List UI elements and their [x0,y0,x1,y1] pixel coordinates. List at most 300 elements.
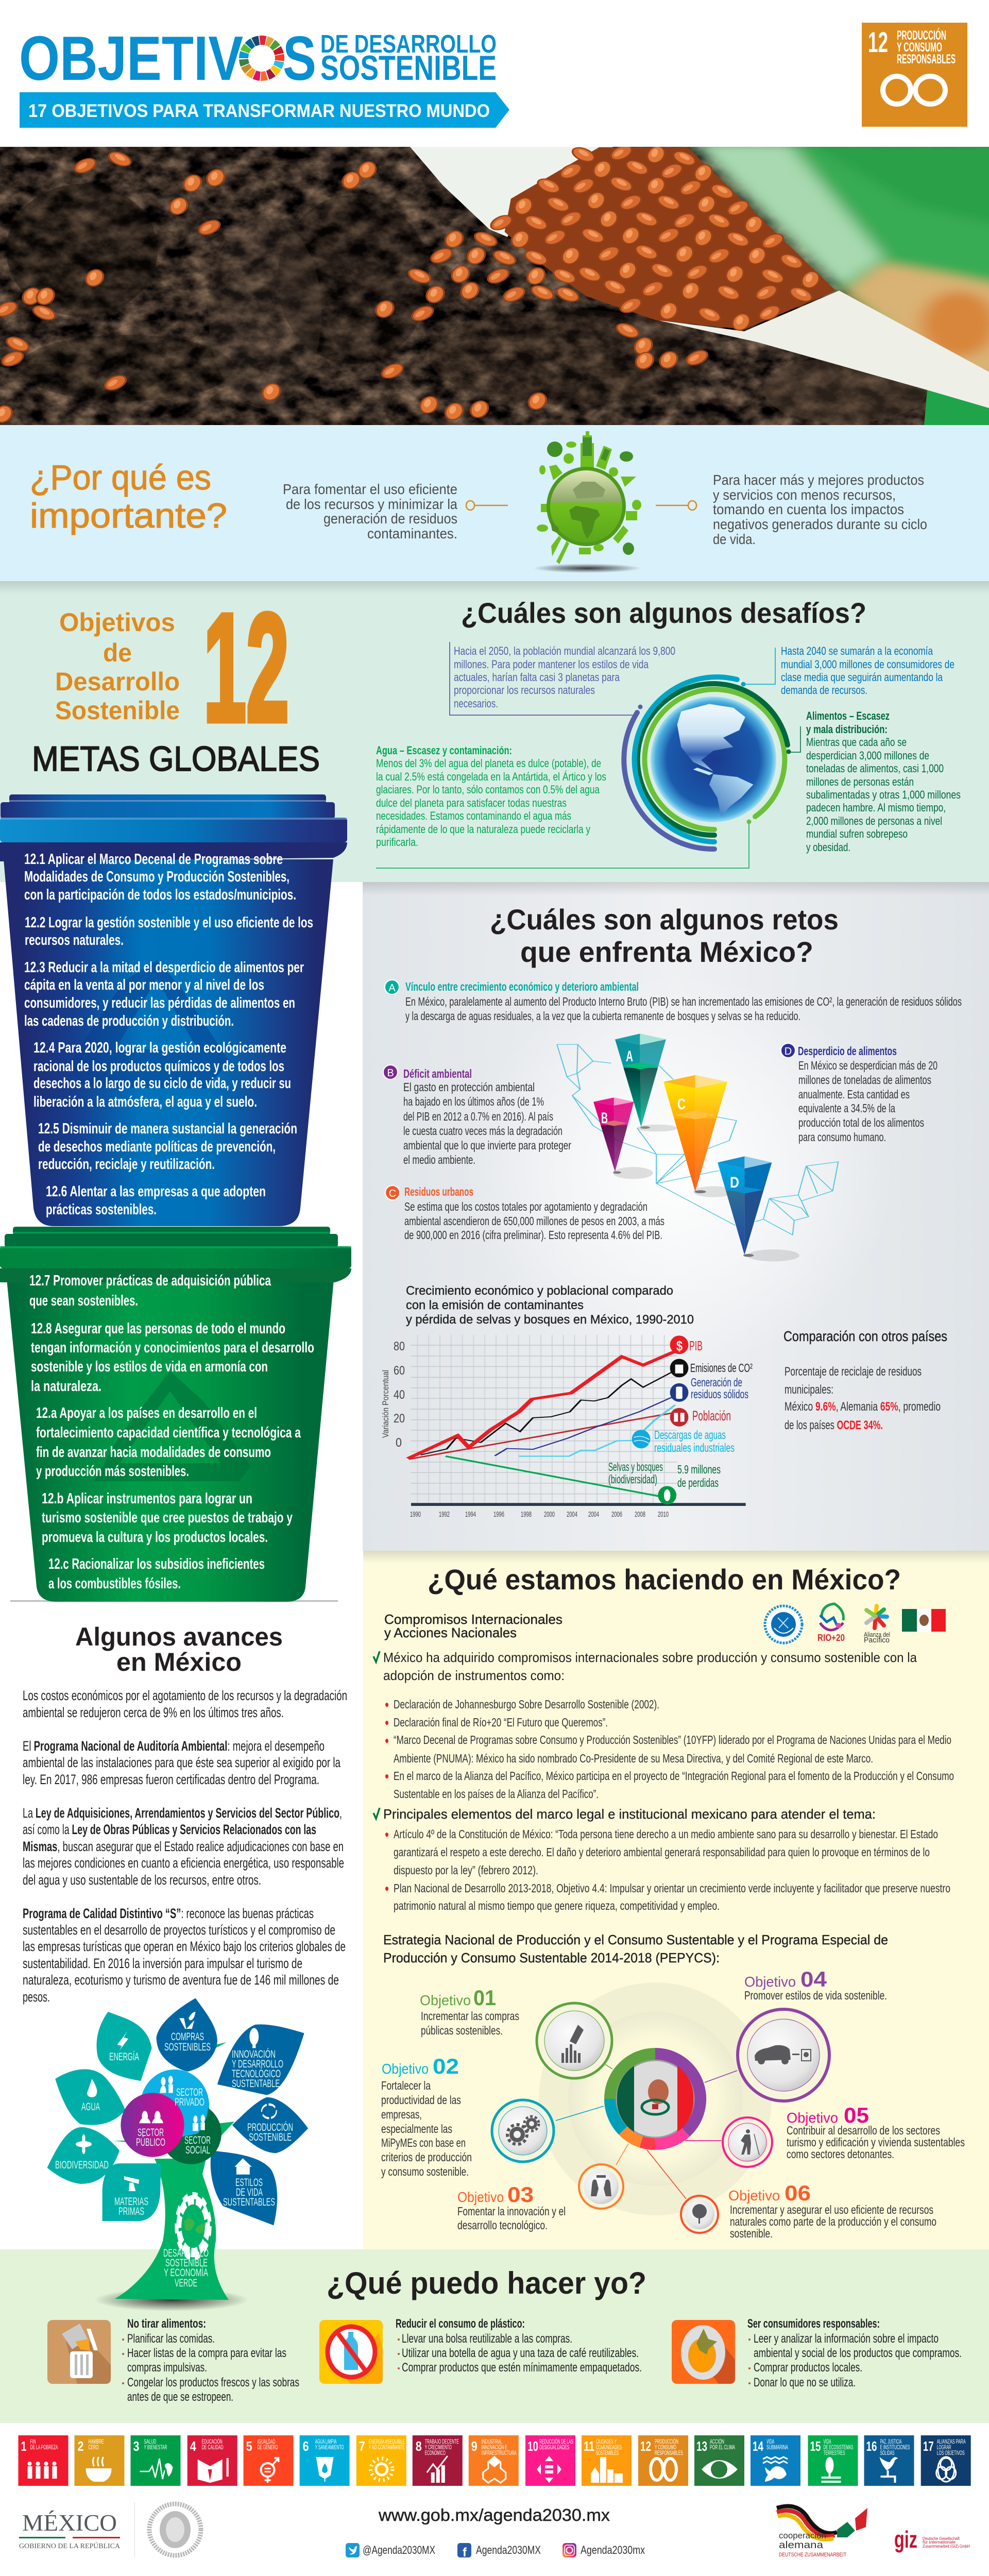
text: compromisos internacionales: Declaración final de Río+20 “El Futuro que Queremos”. [394,1716,608,1729]
text: no tirar alimentos: Planificar las comidas. [127,2332,215,2346]
x axis labels: 2008 [635,1510,645,1519]
text: comparación con otros países: municipales: [785,1383,833,1397]
tile 4: EDUCACIÓN [202,2437,223,2445]
tile 3: SALUD [144,2438,157,2445]
circle objetivo 06 [681,2196,718,2233]
panel: algunos avances en México [23,1622,347,2005]
bin: green recycling bin with targets 12.7 to 12.c [0,1227,351,1602]
prism D [718,1156,772,1255]
text: target 12.3: consumidores, y reducir las pérdidas de alimentos en [24,995,295,1011]
tile 8: ECONÓMICO [425,2449,446,2456]
text: programa nacional de auditoría [23,1738,341,1787]
x axis labels: 2006 [611,1510,622,1519]
logo words de desarrollo sostenible: DE DESARROLLO [320,30,497,58]
twitter: @Agenda2030MX [363,2544,435,2556]
text: no tirar alimentos: compras impulsivas. [127,2361,207,2375]
heading: chart title: y pérdida de selvas y bosques en México, 1990-2010 [406,1313,694,1327]
x axis labels: 1996 [493,1510,504,1519]
text: left reason: Para fomentar el uso eficiente [283,481,457,497]
tile 1: DE LA POBREZA [30,2444,58,2451]
text: objetivo 04: Promover estilos de vida sostenible. [744,1989,887,2002]
tile 15: 15 [810,2438,821,2454]
tree labels: Y ECONOMÍA [164,2267,208,2279]
text: objetivo 02: 02 [433,2054,459,2078]
text: objetivo 02: MiPyMEs con base en [381,2136,466,2149]
prism B [593,1097,634,1172]
tile 13: 13 [696,2438,707,2454]
text: objetivo 01: 01 [473,1986,496,2010]
text: comparación con otros países: Porcentaje de reciclaje de residuos [785,1365,922,1379]
tile 17: LOS OBJETIVOS [937,2449,965,2456]
twitter [346,2543,435,2557]
banner: 17 objetivos: 17 OBJETIVOS PARA TRANSFORMAR NUESTRO MUNDO [28,101,490,121]
x axis labels: 2000 [544,1510,555,1519]
text: objetivo 04 [744,1967,887,2002]
circle objetivo 05 [723,2117,772,2167]
text: target 12.1 [24,851,296,903]
text: objetivo 04: Objetivo [744,1974,796,1990]
heading: estrategia nacional [383,1932,888,1965]
text: target 12.1: Modalidades de Consumo y Producción Sostenibles, [24,869,289,885]
text: target 12.3: cápita en la venta al por menor y al nivel de los [24,977,264,993]
series labels: Selvas y bosques [608,1460,663,1473]
x axis labels: 1992 [439,1510,450,1519]
heading: estrategia nacional: Producción y Consumo Sustentable 2014-2018 (PEPYCS): [383,1950,720,1965]
heading: por qué es importante [30,458,227,535]
connector: right [656,501,696,510]
tile 4: DE CALIDAD [202,2444,224,2451]
heading: chart title: con la emisión de contaminantes [406,1298,584,1312]
text: left reason: generación de residuos [323,511,457,527]
tile 16: SÓLIDAS [880,2449,894,2456]
blue leaves [157,1998,308,2225]
text: costos económicos: ambiental se redujeron cerca de 9% en los últimos tres años. [23,1705,284,1720]
tile 11: SOSTENIBLES [596,2449,619,2456]
text: D desperdicio de alimentos: equivalente a 34.5% de la [798,1101,895,1115]
text: reducir plástico: Utilizar una botella de agua y una taza de café reutilizables. [402,2346,639,2360]
text: compromisos internacionales [373,1650,954,1801]
text: objetivo 03 [457,2182,566,2232]
text: B déficit ambiental: El gasto en protección ambiental [403,1080,535,1094]
text: target 12.b: promueva la cultura y los productos locales. [42,1529,268,1546]
series labels: Generación de [691,1376,742,1389]
text: costos económicos [23,1688,347,1720]
tile 12: RESPONSABLES [655,2449,683,2456]
text: alimentos [786,709,961,854]
text: D desperdicio de alimentos [781,1043,937,1144]
tree labels: BIODIVERSIDAD [55,2159,109,2171]
heading: retos: ¿Cuáles son algunos retos [490,903,839,936]
connector: left [466,501,508,510]
text: left reason: de los recursos y minimizar la [286,496,457,512]
tile 17 [921,2435,971,2486]
instagram [562,2543,645,2557]
tile 11: 11 [584,2438,594,2454]
sector circles [121,2070,221,2164]
banner: 17 objetivos [20,92,509,128]
heading: metas globales: METAS GLOBALES [32,739,320,778]
panel: qué puedo hacer yo [0,2249,989,2423]
tree labels: INNOVACIÓN [232,2048,276,2060]
text: programa de calidad: naturaleza, ecoturismo y turismo de aventura fue de 146 mil millones de [23,1972,339,1988]
tile 4 [187,2435,237,2486]
tile 1: 1 [21,2438,27,2454]
footer: gobierno de México logo: GOBIERNO DE LA REPÚBLICA [19,2541,121,2550]
tile 12: PRODUCCIÓN [655,2437,678,2445]
text: target 12.1: con la participación de todos los estados/municipios. [24,887,296,903]
x axis labels: 2004 [567,1510,577,1519]
tile 7: 7 [359,2438,365,2454]
tile 16 [864,2435,914,2486]
logo: Rio+20 [817,1604,845,1643]
text: clase media: demanda de recursos. [781,684,867,697]
tree labels: SOSTENIBLE [249,2131,292,2143]
tree labels: SUSTENTABLES [223,2196,275,2208]
tile 6: AGUA LIMPIA [315,2438,337,2445]
tile 5: 5 [246,2438,252,2454]
tile 1 [19,2435,68,2486]
text: target 12.6 [46,1183,266,1218]
teal leaves [47,2012,161,2221]
circle objetivo 04 [738,2009,829,2101]
icon: infinity [883,76,945,104]
text: objetivo 05: como sectores detonantes. [787,2147,894,2161]
badge: objetivo 12: Y CONSUMO [897,40,942,55]
series labels: Emisiones de CO² [690,1361,753,1375]
text: alimentos: 2,000 millones de personas a nivel [806,815,942,827]
tile 14 [751,2435,800,2486]
text: D desperdicio de alimentos: producción total de los alimentos [798,1116,924,1129]
text: D desperdicio de alimentos: para consumo humano. [798,1130,886,1144]
text: alimentos: mundial sufren sobrepeso [806,827,908,840]
footer: cooperación alemana logo: alemana [779,2540,824,2551]
text: target 12.2: 12.2 Lograr la gestión sostenible y el uso eficiente de los [25,914,313,931]
text: D desperdicio de alimentos: anualmente. Esta cantidad es [798,1088,910,1101]
text: B déficit ambiental: el medio ambiente. [403,1153,475,1166]
text: agua [376,744,751,868]
panel: retos que enfrenta México [363,882,989,1551]
text: objetivo 03: Fomentar la innovación y el [457,2205,566,2218]
series labels: Población [692,1408,731,1423]
tree labels: PRODUCCIÓN [247,2122,293,2133]
chart: Mexico wireframe map with prisms: C [677,1096,686,1113]
series labels: PIB [689,1338,703,1353]
panel: qué estamos haciendo en México [363,1551,989,2249]
tile 5: IGUALDAD [258,2438,276,2445]
tile 3: 3 [133,2438,139,2454]
series labels: de perdidas [677,1476,719,1489]
tree labels: VERDE [175,2277,197,2289]
text: target 12.7: que sean sostenibles. [29,1293,138,1309]
tree labels: AGUA [81,2101,100,2113]
text: A vínculo: Vínculo entre crecimiento económico y deterioro ambiental [405,980,639,993]
tile 14: 14 [753,2438,763,2454]
heading: retos: que enfrenta México? [520,936,813,968]
x axis labels: 1990 [410,1510,421,1519]
logo words de desarrollo sostenible: SOSTENIBLE [320,48,497,88]
heading: algunos avances: Algunos avances [75,1622,283,1651]
tile 12 [638,2435,688,2486]
text: ley de adquisiciones: del agua y uso sustentable de los recursos, entre otros. [23,1872,261,1888]
text: target 12.4: desechos a lo largo de su ciclo de vida, y reducir su [33,1075,291,1092]
badge: objetivo 12: PRODUCCIÓN [897,27,946,43]
text: agua: purificarla. [376,836,418,849]
text: target 12.4: 12.4 Para 2020, lograr la gestión ecológicamente [33,1040,286,1056]
x axis labels: 2004 [588,1510,599,1519]
footer: url and social [346,2505,645,2560]
bin: blue recycling bin with targets 12.1 to 12.6 [0,794,347,1226]
logo: Rio+20: RIO+20 [817,1633,845,1643]
text: B déficit ambiental: B [387,1067,394,1079]
heading: desafíos: ¿Cuáles son algunos desafíos? [461,597,866,629]
chart: Mexico wireframe map with prisms [557,1033,838,1261]
text: alimentos: Mientras que cada año se [806,736,907,749]
text: objetivo 05 [787,2103,965,2161]
y axis labels: 20 [394,1412,405,1426]
text: reducir plástico: Comprar productos que estén mínimamente empaquetados. [402,2361,642,2375]
tile 2 [74,2435,125,2486]
text: D desperdicio de alimentos: D [785,1046,792,1057]
text: objetivo 02: Objetivo [382,2061,429,2077]
chart: Mexico wireframe map with prisms: D [730,1174,739,1191]
text: marco legal: dispuesto por la ley” (febrero 2012). [394,1863,538,1877]
text: right reason: Para hacer más y mejores productos [713,472,924,488]
text: target 12.c: a los combustibles fósiles. [48,1575,181,1592]
tile 13: POR EL CLIMA [710,2444,735,2451]
text: población mundial [450,642,675,715]
text: objetivo 03: desarrollo tecnológico. [457,2218,548,2232]
text: right reason: negativos generados durante su ciclo [713,516,927,532]
tile 16: 16 [866,2438,877,2454]
text: alimentos: y obesidad. [806,841,850,854]
text: target 12.a [36,1405,301,1480]
icon: SDG colour wheel [236,33,287,83]
tile 16: PAZ, JUSTICIA [880,2438,901,2445]
tile 10: 10 [527,2438,538,2454]
facebook: Agenda2030MX [476,2544,541,2556]
circle objetivo 01 [537,2003,612,2078]
chart: line chart of growth and emissions: $ [676,1338,683,1354]
text: B déficit ambiental: le cuesta cuatro veces más la degradación [403,1124,562,1138]
x axis labels [410,1510,669,1519]
diagram: tree of sustainable production and consumption [47,1998,308,2311]
text: ley de adquisiciones [23,1805,344,1888]
text: agua: Agua – Escasez y contaminación: [376,744,512,757]
text: objetivo 06 [728,2181,936,2240]
text: no tirar alimentos: antes de que se estropeen. [127,2390,233,2404]
tile 2: 2 [77,2438,83,2454]
text: target 12.8: 12.8 Asegurar que las personas de todo el mundo [31,1320,285,1337]
tile 6: 6 [303,2438,309,2454]
text: agua: glaciares. Por lo tanto, sólo contamos con 0.5% del agua [376,783,600,796]
circle objetivo 03 [579,2164,623,2209]
text: objetivo 02: Fortalecer la [381,2079,431,2092]
logo words de desarrollo sostenible [320,30,497,88]
text: compromisos internacionales: Sustentable en los países de la Alianza del Pacífico”. [394,1787,599,1801]
text: población mundial: Hacia el 2050, la población mundial alcanzará los 9,800 [454,645,675,657]
badge: objetivo 12 [862,23,967,127]
text: target 12.8: sostenible y los estilos de vida en armonía con [31,1359,268,1375]
hero photo: seeds on soil [0,140,989,425]
text: objetivo 06: 06 [785,2181,811,2205]
tree labels: SUSTENTABLE [232,2078,280,2090]
text: C residuos urbanos: Se estima que los costos totales por agotamiento y degradación [404,1200,647,1213]
text: objetivo 01: Incrementar las compras [421,2009,519,2023]
tree labels: SOSTENIBLES [164,2041,211,2053]
text: target 12.4 [33,1040,291,1110]
text: target 12.5: reducción, reciclaje y reutilización. [38,1156,215,1173]
text: B déficit ambiental: ambiental que lo que invierte para proteger [403,1139,571,1152]
footer: cooperación alemana logo [777,2506,867,2558]
text: objetivo 03: Objetivo [457,2189,504,2205]
text: consumidores responsables: Ser consumidores responsables: [747,2317,880,2331]
text: D desperdicio de alimentos: Desperdicio de alimentos [798,1044,897,1058]
series labels: 5.9 millones [677,1463,721,1476]
tile 7: ENERGÍA ASEQUIBLE [369,2437,405,2445]
text: clase media [741,645,954,697]
text: ley de adquisiciones: Mismas, buscan asegurar que el Estado realice adjudicaciones con base en [23,1839,344,1854]
chart: line chart of growth and emissions [381,1335,753,1519]
text: reducir plástico: Llevar una bolsa reutilizable a las compras. [402,2332,572,2346]
text: left reason [283,481,457,541]
heading: compromisos internacionales: y Acciones Nacionales [384,1625,517,1640]
text: objetivo 01 [420,1986,519,2037]
icon: green globe city [533,431,641,573]
tile 10 [525,2435,575,2486]
tile 9: INNOVACIÓN E [482,2443,507,2451]
text: programa de calidad: sustentabilidad. En 2016 la inversión para impulsar el turismo de [23,1956,302,1971]
tile 10: DESIGUALDADES [539,2444,569,2451]
text: alimentos: desperdician 3,000 millones de [806,749,929,762]
text: target 12.a: fortalecimiento capacidad científica y tecnológica a [36,1425,301,1441]
tile 16: E INSTITUCIONES [880,2444,910,2451]
text: objetivo 02 [381,2054,472,2178]
tile 6: Y SANEAMIENTO [315,2444,344,2451]
heading: algunos avances [75,1622,283,1676]
tree labels: PÚBLICO [136,2137,165,2148]
text: A vínculo: A [388,982,396,994]
text: ley de adquisiciones: así como la Ley de Obras Públicas y Servicios Relacionados con las [23,1822,316,1837]
heading: compromisos internacionales [384,1612,562,1640]
text: B déficit ambiental [383,1065,571,1166]
text: población mundial: proporcionar los recursos naturales [454,684,595,697]
tile 5 [244,2435,294,2486]
heading: algunos avances: en México [116,1648,242,1676]
text: compromisos internacionales: México ha adquirido compromisos internacionales sobre producción y consumo sostenible con la [383,1650,917,1665]
tile 7 [356,2435,406,2486]
text: target 12.5: 12.5 Disminuir de manera sustancial la generación [38,1121,297,1137]
logo: Alianza del Pacífico: Alianza del [864,1631,890,1638]
chart: globe with concentric arcs [624,677,788,849]
text: no tirar alimentos: No tirar alimentos: [127,2317,206,2331]
instagram: Agenda2030mx [581,2544,645,2556]
heading: objetivos de desarrollo sostenible 12 [55,582,289,754]
text: objetivo 02: especialmente las [381,2122,452,2136]
text: objetivo 06: Objetivo [728,2188,780,2204]
tree labels: MATERIAS [114,2196,148,2208]
text: agua: necesidades. Estamos contaminando el agua más [376,809,571,822]
heading: compromisos internacionales: Compromisos Internacionales [384,1612,562,1627]
tile 17: LOGRAR [937,2444,951,2451]
chart: Mexico wireframe map with prisms: A [626,1048,633,1065]
tile 9: INDUSTRIA, [482,2438,502,2445]
tile 15 [808,2435,858,2486]
heading: chart title: Crecimiento económico y poblacional comparado [406,1284,673,1298]
text: target 12.a: 12.a Apoyar a los países en desarrollo en el [36,1405,257,1421]
text: comparación con otros países: México 9.6%, Alemania 65%, promedio [785,1400,941,1414]
tile 13 [694,2435,744,2486]
tree labels [55,2031,293,2289]
tile 8: 8 [416,2438,422,2454]
footer: url and social: www.gob.mx/agenda2030.mx [378,2505,610,2524]
tree labels: Y DESARROLLO [232,2058,283,2070]
text: agua: dulce del planeta para satisfacer todas nuestras [376,796,567,809]
tree icons [76,2012,277,2191]
footer: giz logo: Deutsche Gesellschaft [923,2536,960,2541]
y axis labels [381,1340,405,1450]
tree labels: ESTILOS [235,2177,263,2189]
text: A vínculo [385,980,962,1023]
heading: objetivos de desarrollo sostenible 12: de [103,638,132,667]
footer: giz logo [894,2526,970,2553]
text: target 12.3 [24,959,304,1029]
tree labels: COMPRAS [171,2031,204,2043]
icon: Mexican flag [902,1609,946,1632]
tree labels: ENERGÍA [109,2051,139,2063]
text: población mundial: millones. Para poder mantener los estilos de vida [454,658,649,671]
text: target 12.c [48,1556,265,1592]
footer: giz logo: giz [894,2526,917,2553]
text: clase media: clase media que seguirán aumentando la [781,671,943,684]
text: target 12.7 [29,1273,271,1309]
tile 17: 17 [923,2438,934,2454]
tree labels: SOSTENIBLE [165,2257,208,2269]
center ring with flag [610,2054,700,2144]
text: alimentos: Alimentos – Escasez [806,709,890,722]
footer: gobierno de México logo [19,2502,201,2557]
text: clase media: Hasta 2040 se sumarán a la economía [781,645,933,657]
text: target 12.c: 12.c Racionalizar los subsidios ineficientes [48,1556,265,1572]
text: B déficit ambiental: del PIB en 2012 a 0.7% en 2016). Al país [403,1110,553,1123]
text: consumidores responsables: Donar lo que no se utiliza. [754,2376,856,2389]
tree labels: TECNOLÓGICO [232,2068,281,2080]
tree labels: PRIMAS [118,2206,144,2217]
x axis labels: 2010 [658,1510,669,1519]
text: A vínculo: y la descarga de aguas residuales, a la vez que la cubierta remanente de bosques y selvas se ha reducido. [405,1009,800,1023]
series labels [608,1338,753,1489]
prism A [615,1033,666,1127]
text: right reason: de vida. [713,531,756,547]
text: target 12.4: racional de los productos químicos y de todos los [33,1058,284,1075]
text: B déficit ambiental: Déficit ambiental [403,1067,472,1080]
logo word OBJETIVOS: S [283,23,316,93]
text: target 12.a: y producción más sostenibles. [36,1463,189,1480]
tile 11 [582,2435,632,2486]
text: target 12.1: 12.1 Aplicar el Marco Decenal de Programas sobre [24,851,283,868]
strip: 17 SDG tiles [19,2435,971,2486]
text: no tirar alimentos [122,2317,299,2404]
logo: Alianza del Pacífico [864,1606,890,1645]
prism C [663,1075,727,1192]
tile 1: FIN [30,2438,36,2445]
panel: mint background [0,581,989,882]
text: objetivo 02: y consumo sostenible. [381,2165,469,2178]
heading: objetivos de desarrollo sostenible 12: Objetivos [59,608,175,637]
text: programa de calidad: Programa de Calidad Distintivo “S”: reconoce las buenas prácticas [23,1906,314,1921]
text: población mundial: necesarios. [454,697,498,710]
text: C residuos urbanos: C [389,1188,396,1199]
text: reducir plástico [396,2317,642,2375]
